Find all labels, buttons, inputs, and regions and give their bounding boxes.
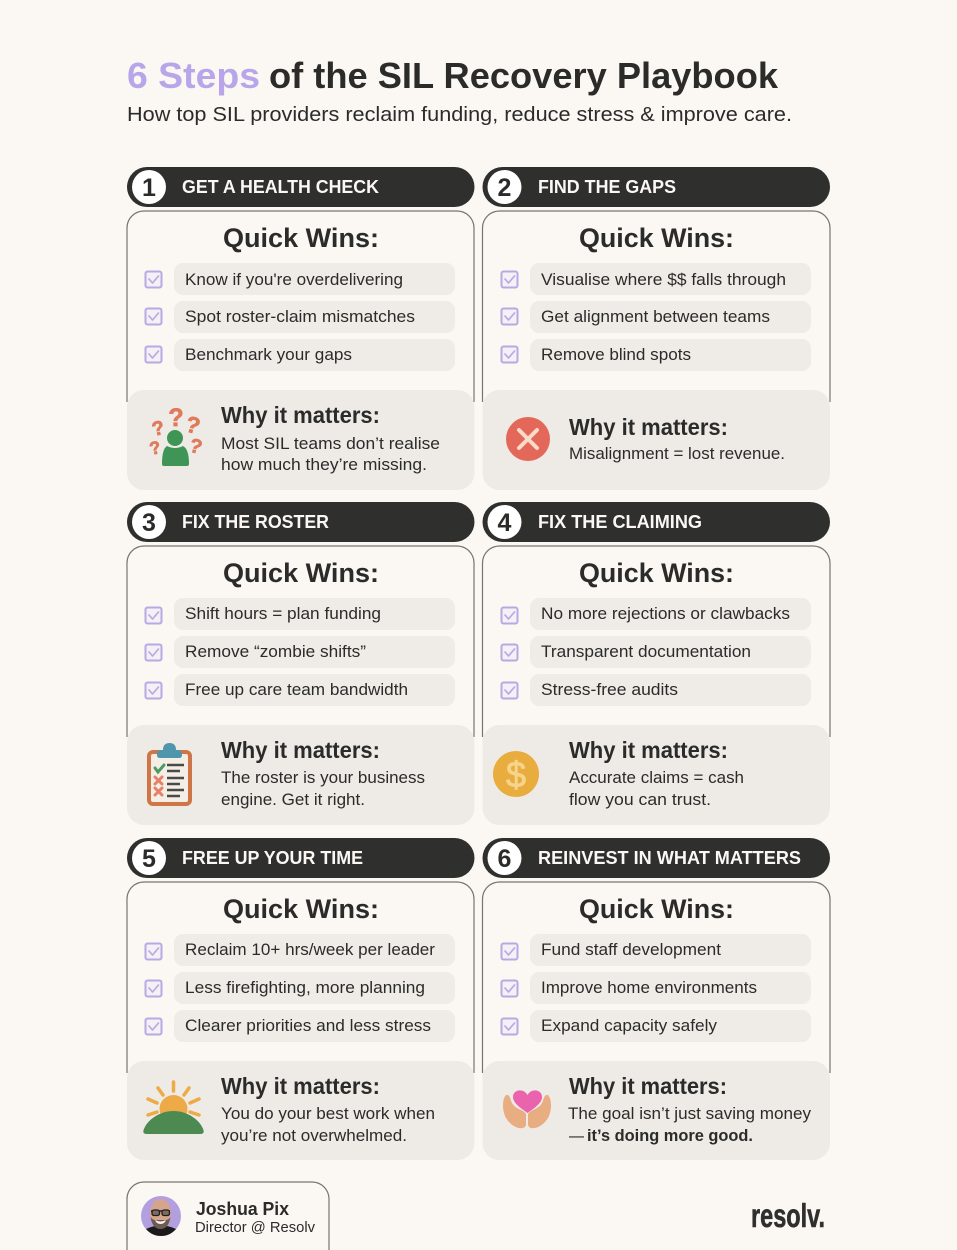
step 6 header — [482, 838, 830, 878]
why it matters panel — [127, 390, 474, 490]
author card: Joshua Pix — [196, 1198, 290, 1219]
panel: step 3 — [127, 502, 474, 825]
icon: person with question marks: ? — [150, 417, 166, 441]
quick wins list: Improve home environments — [541, 979, 757, 997]
icon: red cross — [506, 417, 550, 461]
quick wins list — [146, 263, 455, 371]
why it matters panel — [482, 725, 830, 825]
quick wins list — [146, 598, 455, 706]
step 3 header — [127, 502, 474, 542]
heading: quick wins: Quick Wins: — [579, 223, 734, 253]
title: of the SIL Recovery Playbook — [269, 55, 779, 96]
panel: step 2 — [482, 167, 830, 490]
why it matters panel: Most SIL teams don’t realise — [221, 435, 440, 453]
quick wins list: Spot roster-claim mismatches — [185, 308, 415, 326]
icon: author avatar — [141, 1196, 181, 1236]
icon: person with question marks — [148, 404, 204, 466]
icon: person with question marks: ? — [168, 404, 184, 432]
heading: quick wins: Quick Wins: — [223, 894, 379, 924]
quick wins list — [146, 934, 455, 1042]
author card: Director @ Resolv — [195, 1219, 315, 1236]
step 1 header — [127, 167, 474, 207]
icon: sun over hill — [143, 1082, 204, 1134]
quick wins list: Shift hours = plan funding — [185, 605, 381, 623]
why it matters panel — [127, 1061, 474, 1160]
why it matters panel: engine. Get it right. — [221, 791, 365, 809]
step 2 header — [482, 167, 830, 207]
step 2 header: FIND THE GAPS — [538, 176, 676, 197]
icon: clipboard — [149, 743, 190, 804]
quick wins list: Remove blind spots — [541, 346, 691, 364]
icon: person with question marks: ? — [148, 437, 162, 459]
why it matters panel: You do your best work when — [221, 1105, 435, 1123]
panel: step 5 — [127, 838, 474, 1160]
step 2 header: 2 — [498, 174, 511, 202]
logo: resolv: resolv. — [751, 1197, 825, 1234]
step 3 header: 3 — [142, 509, 156, 537]
why it matters panel: Accurate claims = cash — [569, 769, 744, 787]
quick wins list: Benchmark your gaps — [185, 346, 352, 364]
why it matters panel — [127, 725, 474, 825]
heading: quick wins: Quick Wins: — [579, 894, 734, 924]
icon: person with question marks: ? — [183, 411, 203, 439]
quick wins list: Free up care team bandwidth — [185, 681, 408, 699]
why it matters panel: Why it matters: — [569, 414, 728, 440]
why it matters panel — [482, 1061, 830, 1160]
step 1 header: 1 — [142, 174, 156, 202]
quick wins list: Expand capacity safely — [541, 1017, 718, 1035]
heading: quick wins: Quick Wins: — [223, 558, 379, 588]
step 5 header: 5 — [142, 845, 156, 873]
step 1 header: GET A HEALTH CHECK — [182, 176, 380, 197]
quick wins list: No more rejections or clawbacks — [541, 605, 790, 623]
why it matters panel — [482, 390, 830, 490]
why it matters panel: Why it matters: — [569, 1073, 727, 1099]
step 5 header: FREE UP YOUR TIME — [182, 847, 363, 868]
why it matters panel: you’re not overwhelmed. — [221, 1127, 407, 1145]
step 5 header — [127, 838, 474, 878]
subtitle: How top SIL providers reclaim funding, reduce stress & improve care. — [127, 103, 792, 126]
title: 6 Steps — [127, 55, 260, 96]
why it matters panel: it’s doing more good. — [587, 1127, 753, 1145]
why it matters panel: The goal isn’t just saving money — [568, 1105, 812, 1123]
step 4 header: FIX THE CLAIMING — [538, 511, 702, 532]
panel: step 4 — [482, 502, 830, 825]
quick wins list — [502, 598, 811, 706]
quick wins list: Visualise where $$ falls through — [541, 271, 786, 289]
why it matters panel: how much they’re missing. — [221, 456, 427, 474]
icon: gold dollar coin: $ — [506, 754, 526, 795]
why it matters panel: Why it matters: — [221, 1073, 380, 1099]
step 3 header: FIX THE ROSTER — [182, 511, 329, 532]
quick wins list: Know if you're overdelivering — [185, 271, 403, 289]
why it matters panel: Why it matters: — [569, 737, 728, 763]
quick wins list — [502, 934, 811, 1042]
step 4 header — [482, 502, 830, 542]
icon: gold dollar coin — [493, 751, 539, 797]
panel: step 6 — [482, 838, 830, 1160]
why it matters panel: Misalignment = lost revenue. — [569, 445, 785, 463]
step 6 header: 6 — [498, 845, 511, 873]
quick wins list: Less firefighting, more planning — [185, 979, 425, 997]
icon: person with question marks: ? — [187, 435, 204, 459]
quick wins list: Get alignment between teams — [541, 308, 770, 326]
quick wins list: Clearer priorities and less stress — [185, 1017, 431, 1035]
quick wins list: Transparent documentation — [541, 643, 751, 661]
why it matters panel: Why it matters: — [221, 737, 380, 763]
why it matters panel: — — [569, 1127, 584, 1145]
quick wins list: Stress-free audits — [541, 681, 678, 699]
panel: step 1 — [127, 167, 474, 490]
quick wins list: Fund staff development — [541, 941, 721, 959]
author card — [127, 1182, 329, 1250]
quick wins list — [502, 263, 811, 371]
heading: quick wins: Quick Wins: — [223, 223, 379, 253]
heading: quick wins: Quick Wins: — [579, 558, 734, 588]
quick wins list: Remove “zombie shifts” — [185, 643, 366, 661]
step 6 header: REINVEST IN WHAT MATTERS — [538, 847, 801, 868]
quick wins list: Reclaim 10+ hrs/week per leader — [185, 941, 436, 959]
icon: hands holding heart — [503, 1090, 551, 1128]
step 4 header: 4 — [498, 509, 512, 537]
why it matters panel: Why it matters: — [221, 402, 380, 428]
why it matters panel: The roster is your business — [221, 769, 425, 787]
why it matters panel: flow you can trust. — [569, 791, 711, 809]
